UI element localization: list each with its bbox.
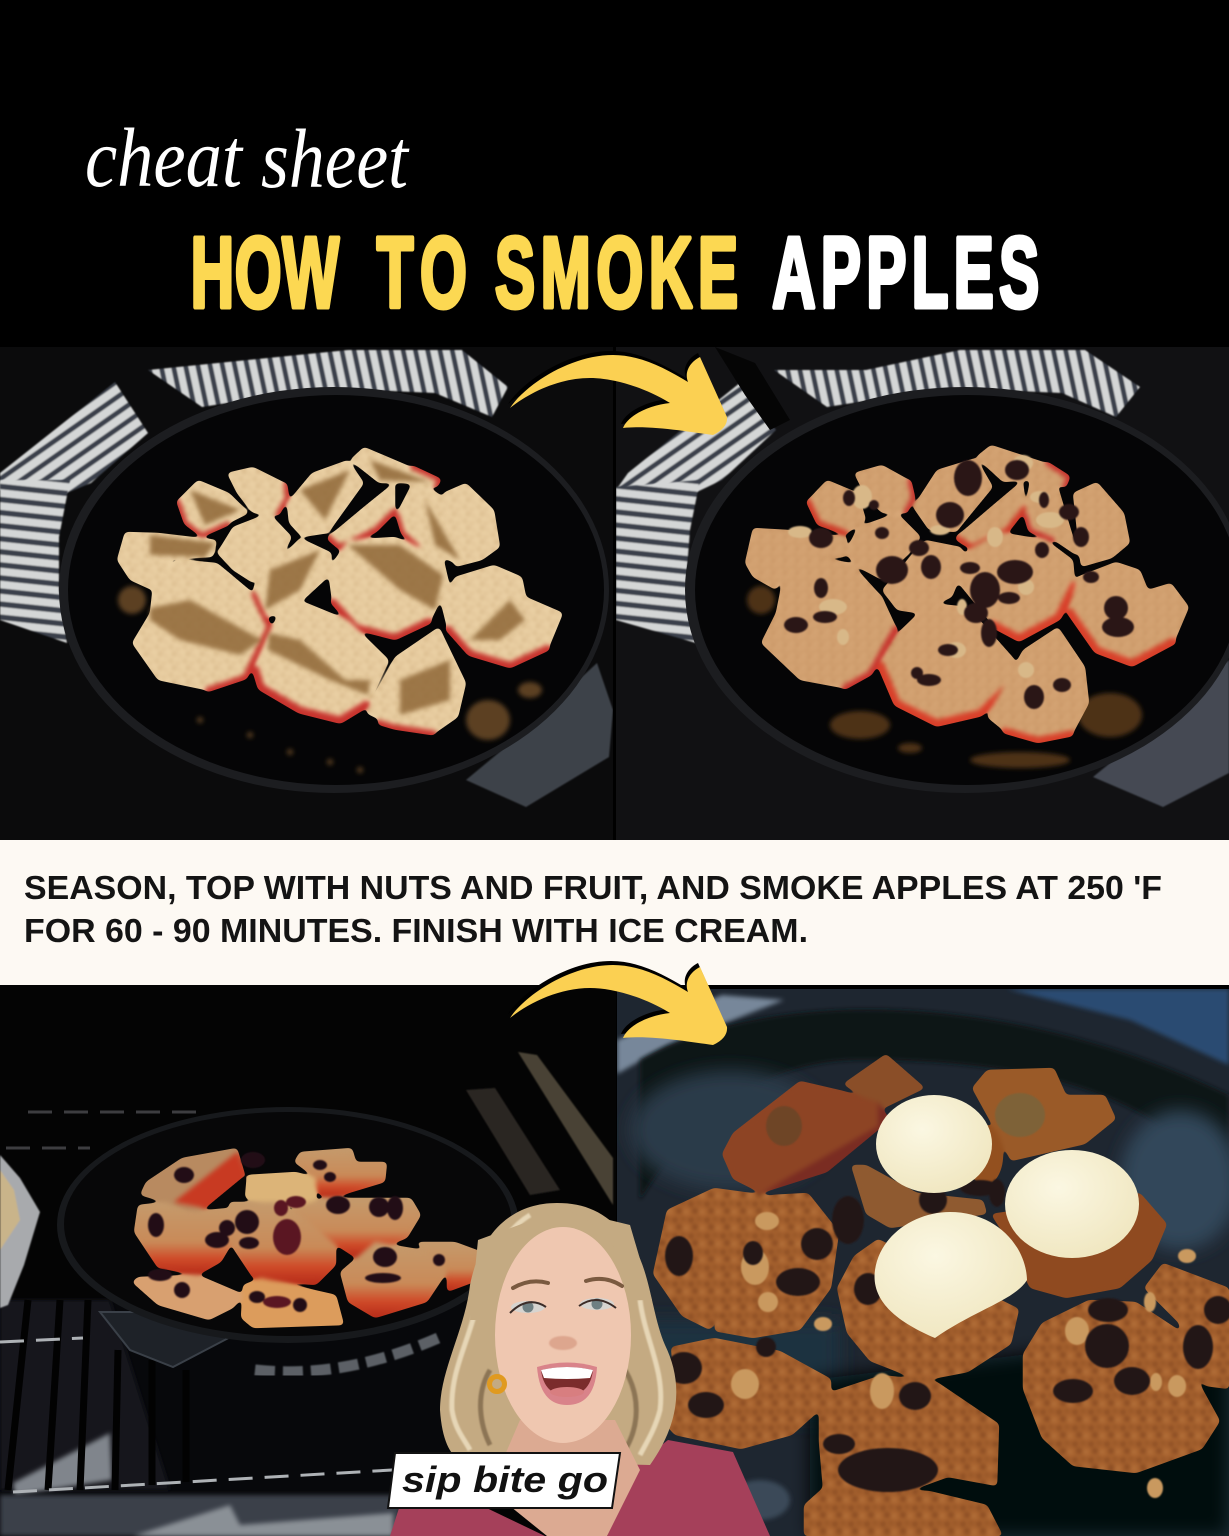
neck and chest <box>490 1420 640 1536</box>
photo: apples topped with nuts and fruit <box>616 347 1229 840</box>
eyes <box>510 1298 616 1313</box>
brown sugar crumbs <box>118 586 542 773</box>
towel: striped cloth lower left <box>616 480 700 643</box>
title: how to smoke apples <box>191 217 1039 329</box>
towel: striped cloth upper left <box>616 382 776 500</box>
header background <box>0 0 1229 347</box>
toppings: walnuts <box>788 455 1064 678</box>
title: how to smoke apples: SMOKE <box>495 217 738 329</box>
open mouth <box>537 1362 597 1405</box>
grill grate highlights <box>0 1112 392 1492</box>
nose shadow <box>549 1336 577 1350</box>
photo: seasoned apples in skillet <box>0 347 613 840</box>
skillet rim <box>640 1010 1229 1200</box>
hair highlights <box>452 1215 661 1455</box>
background: pan rim highlight <box>617 995 784 1074</box>
photo: apples on smoker grill <box>0 1051 614 1536</box>
script heading: cheat sheet: sheet <box>261 112 410 206</box>
skillet <box>685 387 1229 793</box>
caption text: SEASON, TOP WITH NUTS AND FRUIT, AND SMOKE APPLES AT 250 'F <box>24 869 1162 906</box>
foil packet <box>0 1155 40 1308</box>
pan helper handle <box>1093 660 1229 807</box>
portrait of smiling woman <box>390 1203 770 1536</box>
raisins <box>665 1179 1229 1492</box>
apple wedges <box>117 447 563 733</box>
pan helper handle <box>466 663 613 807</box>
skillet floor <box>630 1070 1229 1536</box>
front hair strands <box>470 1208 652 1320</box>
towel: striped cloth upper left <box>0 382 148 500</box>
ice cream scoops <box>875 1095 1139 1338</box>
skillet <box>59 387 609 793</box>
background: blue cloth corner <box>1007 989 1229 1065</box>
earring <box>490 1376 504 1392</box>
pan helper handle <box>100 1312 240 1367</box>
photo: finished smoked apples with ice cream <box>617 989 1229 1536</box>
arrow: top yellow curved arrow <box>508 351 727 435</box>
smoker lid bars <box>466 1052 613 1205</box>
eyebrows <box>513 1279 622 1288</box>
toppings: raisins and cranberries <box>148 1152 445 1312</box>
script heading: cheat sheet <box>85 111 410 206</box>
caption text <box>24 869 1162 949</box>
pan underside ribs <box>255 1335 445 1372</box>
spice crumbs <box>747 586 1142 768</box>
face <box>495 1227 631 1443</box>
smoked apple halves <box>653 1054 1229 1536</box>
title: how to smoke apples: APPLES <box>772 217 1039 329</box>
skillet <box>57 1107 519 1343</box>
caption text: FOR 60 - 90 MINUTES. FINISH WITH ICE CREAM. <box>24 912 808 949</box>
hair <box>440 1203 676 1465</box>
logo badge: sip bite go <box>388 1453 620 1508</box>
towel: striped cloth lower left <box>0 480 70 643</box>
towel: striped cloth top <box>774 350 1140 417</box>
caption band <box>0 840 1229 985</box>
title: how to smoke apples: HOW <box>191 217 339 329</box>
walnuts <box>731 1093 1196 1498</box>
script heading: cheat sheet: cheat <box>85 111 244 205</box>
apple wedges <box>745 445 1189 740</box>
logo badge: sip bite go: sip bite go <box>402 1459 608 1500</box>
pan handle <box>715 347 790 430</box>
grill grate bars <box>8 1300 186 1490</box>
title: how to smoke apples: TO <box>377 217 467 329</box>
shirt <box>390 1440 770 1536</box>
foil liner <box>0 1300 399 1536</box>
apple wedges <box>132 1148 482 1328</box>
towel: striped cloth top <box>148 350 508 417</box>
arrow: bottom yellow curved arrow <box>508 961 727 1045</box>
toppings: raisins and cranberries <box>784 460 1134 709</box>
sugar streaks on apples <box>150 460 525 715</box>
